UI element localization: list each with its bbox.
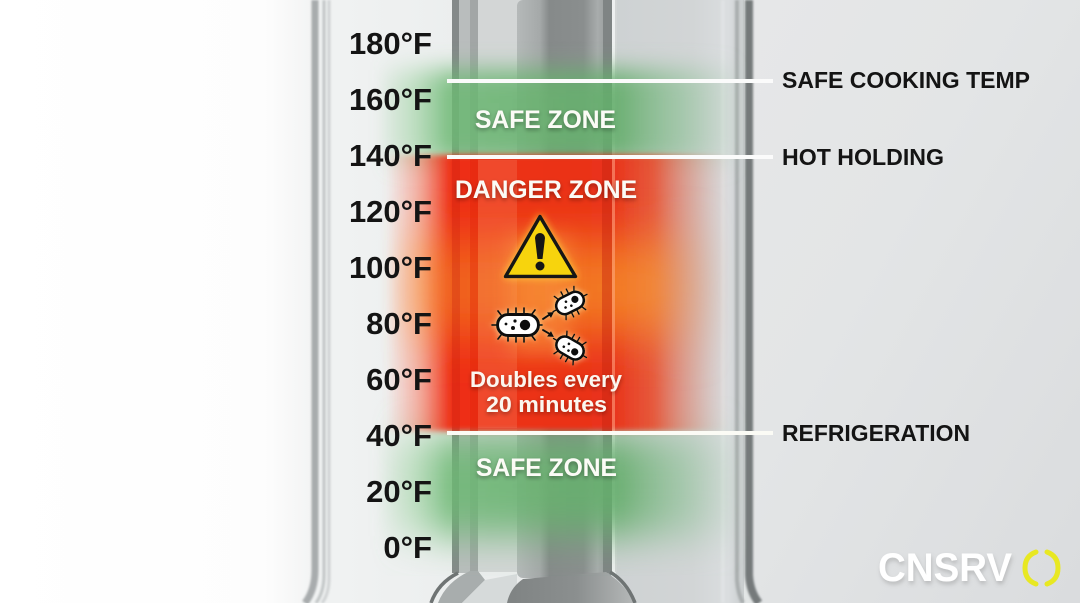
- bacteria growth note: 20 minutes: [486, 392, 607, 417]
- temperature scale labels: [349, 26, 432, 565]
- temperature scale labels: 0°F: [383, 530, 432, 565]
- safe zone upper colour band: [375, 70, 745, 162]
- arrow down: [543, 330, 554, 337]
- zone labels: SAFE ZONE: [475, 106, 616, 134]
- threshold line: hot holding: [447, 155, 773, 159]
- temperature scale labels: 160°F: [349, 82, 432, 117]
- threshold labels: SAFE COOKING TEMP: [782, 67, 1030, 93]
- temperature scale labels: 20°F: [366, 474, 432, 509]
- small bacterium lower: [547, 326, 593, 370]
- safe zone lower colour band: [375, 436, 745, 536]
- temperature scale labels: 100°F: [349, 250, 432, 285]
- logo: CNSRV: CNSRV: [878, 546, 1012, 590]
- temperature scale labels: 120°F: [349, 194, 432, 229]
- threshold labels: HOT HOLDING: [782, 144, 944, 170]
- logo ring: [1025, 552, 1058, 584]
- threshold line: safe cooking temp: [447, 79, 773, 83]
- zone labels: DANGER ZONE: [455, 176, 637, 204]
- arrow up: [543, 312, 554, 319]
- threshold labels: REFRIGERATION: [782, 420, 970, 446]
- bacteria growth note: Doubles every: [470, 367, 623, 392]
- temperature scale labels: 180°F: [349, 26, 432, 61]
- outer glass tube edges: [305, 0, 759, 603]
- icon: warning triangle: [506, 216, 576, 276]
- inner tube: [452, 0, 617, 578]
- small bacterium upper: [547, 282, 593, 324]
- zone labels: [455, 106, 637, 482]
- bacteria growth note: [470, 367, 623, 417]
- bulb: [431, 571, 635, 603]
- temperature scale labels: 140°F: [349, 138, 432, 173]
- zone labels: SAFE ZONE: [476, 454, 617, 482]
- threshold labels: [782, 67, 1030, 446]
- large bacterium: [492, 308, 542, 342]
- temperature scale labels: 80°F: [366, 306, 432, 341]
- icon: bacteria multiplying: [492, 282, 593, 370]
- danger zone colour band: [385, 155, 730, 431]
- temperature scale labels: 40°F: [366, 418, 432, 453]
- thermometer glass body: [302, 0, 762, 603]
- temperature scale labels: 60°F: [366, 362, 432, 397]
- threshold line: refrigeration: [447, 431, 773, 435]
